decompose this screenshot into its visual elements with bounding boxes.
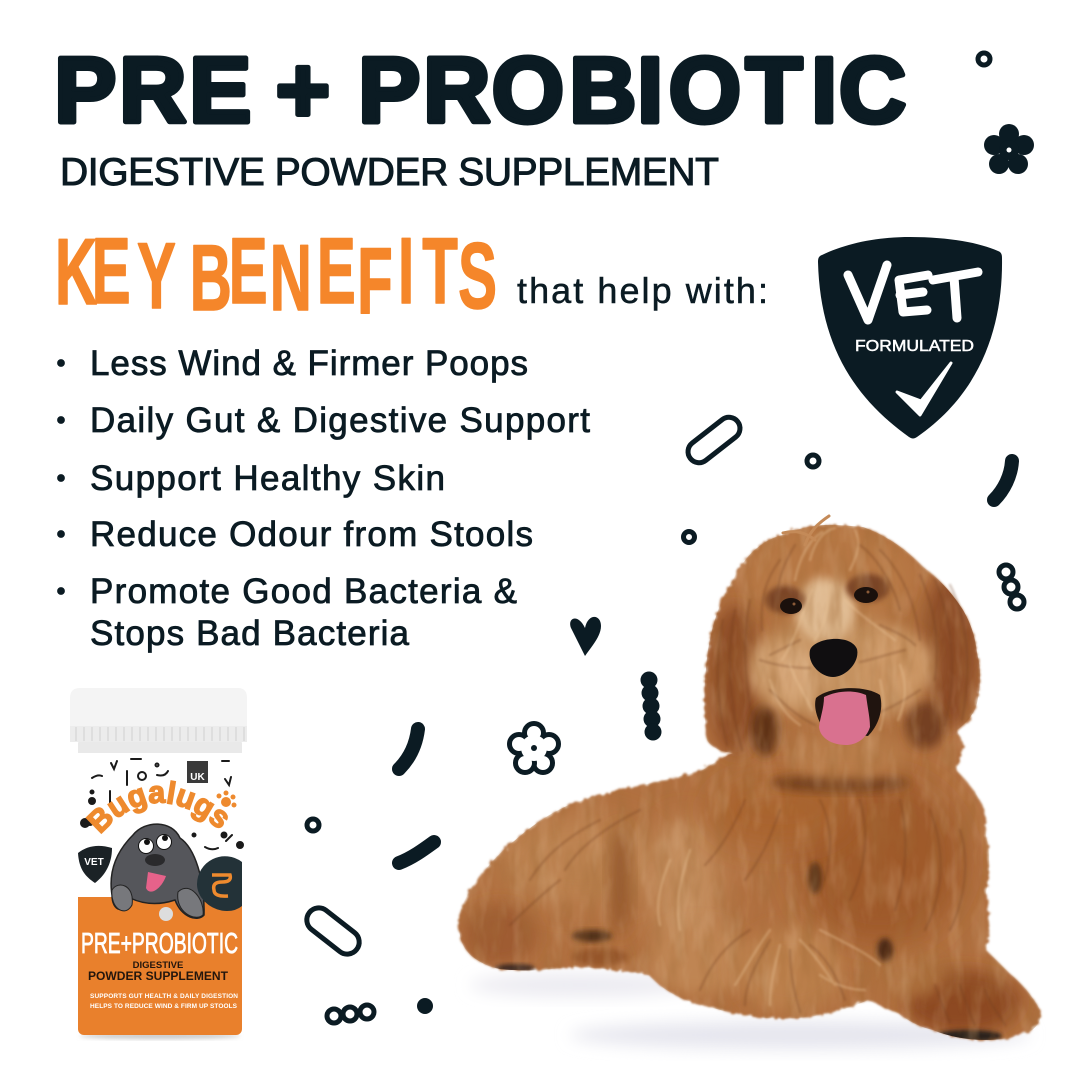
jar made in uk tag	[187, 761, 208, 783]
jar vet badge	[78, 846, 112, 883]
benefits list	[58, 344, 590, 653]
dog silhouette	[459, 525, 1041, 1040]
jar descriptor: DIGESTIVE	[133, 960, 183, 971]
dog eyes	[780, 587, 878, 614]
dog nose	[810, 639, 857, 677]
jar made in uk tag: UK	[190, 772, 205, 783]
icon: heart	[570, 617, 601, 656]
heading: key benefits: KEY BENEFITS	[55, 215, 497, 333]
jar descriptor: POWDER SUPPLEMENT	[88, 969, 229, 983]
jar lid	[70, 688, 247, 742]
benefits list: Stops Bad Bacteria	[90, 614, 410, 653]
heading suffix: that help with:	[517, 270, 768, 311]
jar doodles	[81, 759, 243, 849]
benefits list: Reduce Odour from Stools	[90, 515, 533, 554]
dog fur strands: light	[658, 528, 905, 1005]
jar product name: PRE+PROBIOTIC	[81, 928, 238, 960]
benefits list: Less Wind & Firmer Poops	[90, 344, 528, 383]
icon: outline flower	[510, 724, 558, 772]
dog head tuft	[783, 516, 829, 545]
dog mouth	[815, 688, 881, 736]
benefits list: Promote Good Bacteria &	[90, 572, 517, 611]
jar claims: SUPPORTS GUT HEALTH & DAILY DIGESTION	[90, 993, 238, 1000]
jar brand name: Bugalugs	[85, 780, 228, 834]
jar descriptor	[88, 960, 229, 983]
subtitle: DIGESTIVE POWDER SUPPLEMENT	[60, 151, 719, 194]
jar round gut badge	[197, 856, 242, 911]
dog tongue	[819, 691, 870, 745]
benefits list: Support Healthy Skin	[90, 459, 445, 498]
product jar	[70, 688, 247, 1041]
dog fur strands: dark	[510, 545, 1005, 1025]
dog photo illustration	[450, 510, 1050, 1050]
dog shading	[450, 510, 1050, 1050]
badge: vet formulated shield: FORMULATED	[855, 338, 974, 355]
jar claims: HELPS TO REDUCE WIND & FIRM UP STOOLS	[90, 1003, 238, 1010]
jar claims	[90, 993, 238, 1010]
badge: vet formulated shield	[818, 237, 1002, 438]
benefits list: Daily Gut & Digestive Support	[90, 401, 590, 440]
jar cartoon dog	[111, 824, 204, 921]
jar vet badge: VET	[84, 857, 104, 868]
title: PRE + PROBIOTIC	[54, 38, 906, 142]
icon: solid flower	[984, 124, 1034, 174]
doodles	[302, 53, 1024, 1023]
icon: dot	[417, 998, 433, 1014]
